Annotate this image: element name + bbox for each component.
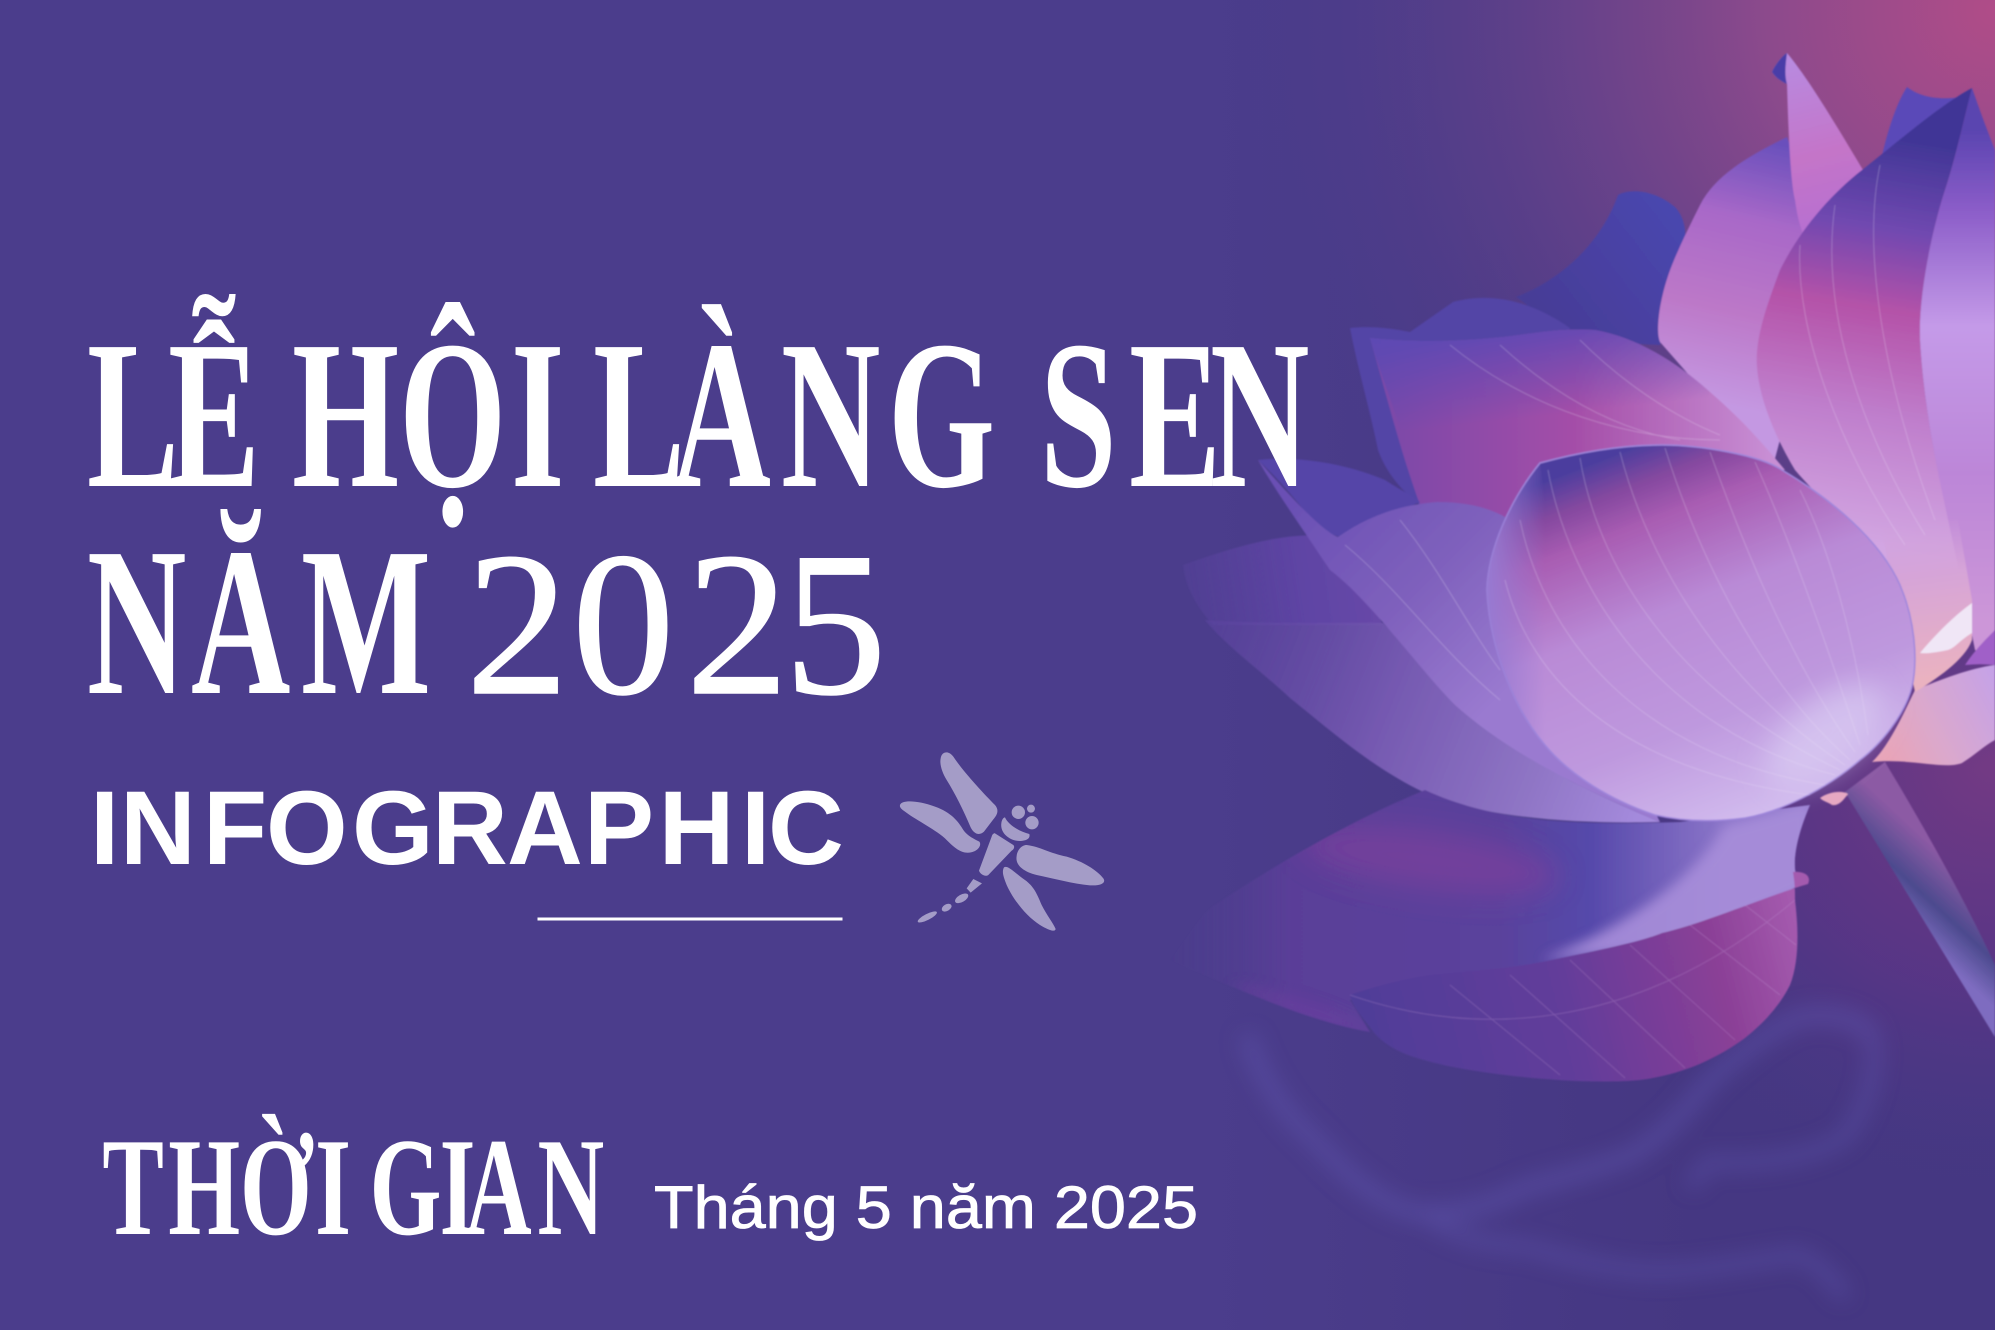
icon: dragonfly [900, 752, 1104, 931]
cream outer petal [1872, 665, 1995, 765]
upper left petal [1370, 330, 1785, 540]
heading: THỜI GIAN: THỜI GIAN [102, 1109, 604, 1265]
middle left petal [1258, 460, 1660, 822]
title [87, 295, 1309, 739]
stem [1845, 762, 1995, 1037]
white inner sliver [1920, 603, 1972, 653]
date text: Tháng 5 năm 2025 [654, 1174, 1198, 1241]
subtitle: INFOGRAPHIC: INFOGRAPHIC [90, 770, 844, 887]
far blue petal [1880, 87, 1972, 170]
purple inner fold [1965, 630, 1995, 665]
smoke reflection [1247, 1015, 1874, 1298]
lower blue petal [1170, 790, 1810, 1032]
tip petal [1772, 53, 1866, 238]
wide left petal, lower [1205, 620, 1660, 822]
far right petal [1920, 88, 1995, 660]
underline [538, 918, 842, 920]
lower petal shading [1256, 806, 1810, 1022]
petal veins [1345, 165, 1935, 795]
dark left petal [1258, 459, 1420, 537]
main front petal [1487, 445, 1915, 821]
leaf veins [1350, 900, 1796, 1078]
back pink petal [1658, 137, 1830, 470]
back blue petal [1516, 191, 1685, 345]
lower leaf [1350, 872, 1809, 1082]
big right petal [1757, 88, 1972, 590]
wide left petal, upper [1183, 535, 1383, 625]
title: LỄ HỘI LÀNG SEN [87, 295, 1309, 532]
lotus flower [1170, 53, 1995, 1082]
bud [1820, 792, 1848, 805]
title: 2025 [466, 511, 886, 738]
title: NĂM [87, 504, 431, 739]
inner peach petal [1880, 520, 1972, 692]
blue edge behind upper left petal [1350, 298, 1570, 520]
